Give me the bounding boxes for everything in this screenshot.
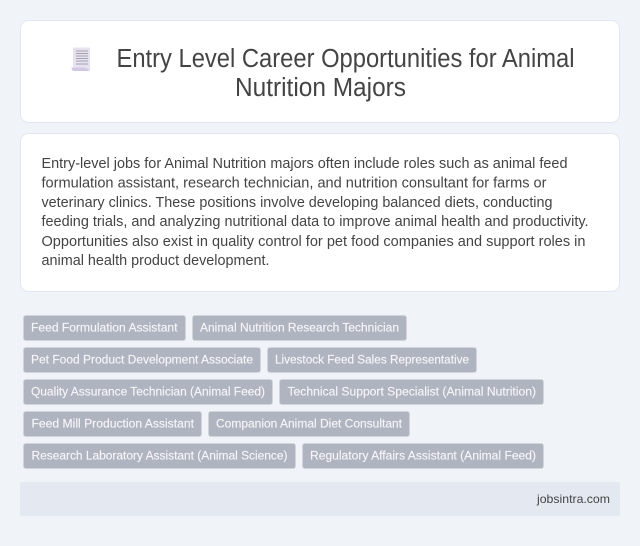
tag: Research Laboratory Assistant (Animal Science) [32, 448, 288, 462]
tag: Technical Support Specialist (Animal Nutrition) [288, 384, 536, 398]
title: Entry Level Career Opportunities for Animal [116, 45, 574, 73]
panel: description [20, 134, 620, 292]
tag [268, 348, 476, 372]
tag: Companion Animal Diet Consultant [216, 416, 403, 430]
text block: description: Opportunities also exist in quality control for pet food companies and support roles in [42, 234, 586, 250]
tag: Animal Nutrition Research Technician [200, 320, 399, 334]
text block: description: veterinary clinics. These positions involve developing balanced diets, conducting [42, 195, 552, 211]
tag: Livestock Feed Sales Representative [275, 352, 469, 366]
title: Nutrition Majors [235, 74, 406, 102]
text block: description: formulation assistant, research technician, and nutrition consultant for farms or [42, 176, 547, 192]
text block: description: Entry-level jobs for Animal Nutrition majors often include roles such as animal feed [42, 156, 568, 172]
tag [24, 412, 202, 436]
tag [24, 316, 186, 340]
footer: jobsintra.com [536, 492, 610, 506]
tag [208, 412, 410, 436]
icon: document scroll [72, 48, 90, 71]
text block: description [42, 156, 588, 269]
tag [24, 348, 260, 372]
tag [24, 444, 296, 468]
tag: Feed Formulation Assistant [31, 320, 178, 334]
tag: Regulatory Affairs Assistant (Animal Feed) [310, 448, 536, 462]
title [116, 45, 574, 102]
text block: description: feeding trials, and analyzing nutritional data to improve animal health and productivity. [42, 214, 588, 230]
tag [192, 316, 406, 340]
panel: header [20, 20, 620, 122]
tag: Feed Mill Production Assistant [32, 416, 195, 430]
tag: Quality Assurance Technician (Animal Feed) [31, 384, 265, 398]
tag [24, 380, 272, 404]
tag [302, 444, 544, 468]
tag [280, 380, 544, 404]
tag: Pet Food Product Development Associate [31, 352, 253, 366]
footer [20, 482, 620, 516]
tag list [24, 316, 544, 468]
text block: description: animal health product development. [42, 253, 270, 269]
